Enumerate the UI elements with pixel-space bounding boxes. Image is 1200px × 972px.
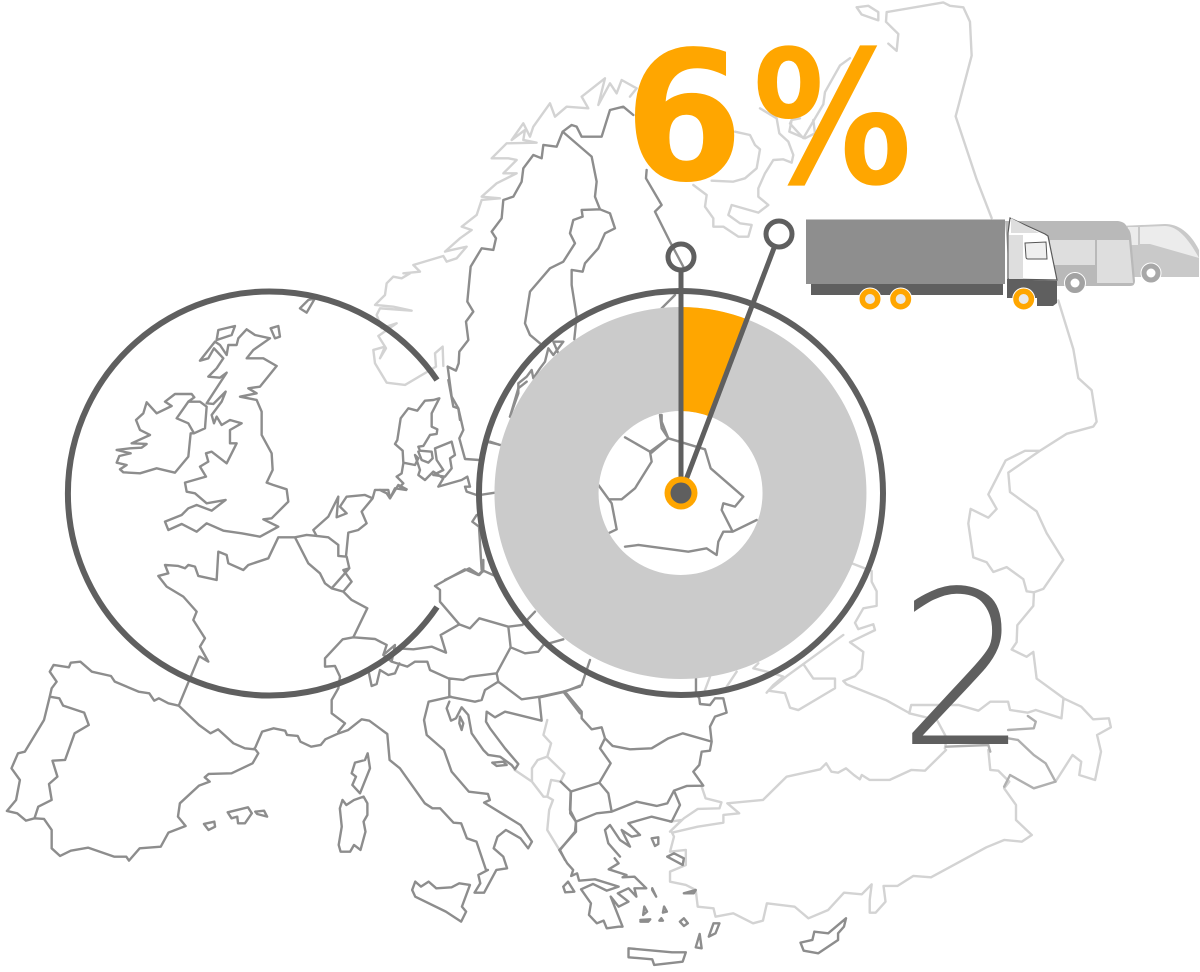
map: non-highlighted countries in light grey <box>373 2 1111 923</box>
donut remainder <box>494 307 866 679</box>
icon: truck <box>806 218 1057 310</box>
donut orange segment <box>680 307 749 417</box>
pointers with end markers <box>668 221 792 493</box>
outer ring <box>479 291 883 695</box>
donut centre hub <box>664 476 698 510</box>
icon: rear coach <box>1120 224 1199 283</box>
big percentage <box>624 11 912 227</box>
map: highlighted countries in darker grey <box>7 107 1056 965</box>
donut chart: 6 percent share <box>479 291 883 695</box>
large number 2: 2 <box>898 546 1029 795</box>
angled pointer <box>681 248 774 493</box>
big percentage: % <box>752 11 912 227</box>
vertical pointer marker <box>668 244 694 270</box>
icon: middle bus <box>1005 221 1135 294</box>
left partial circle <box>68 292 437 695</box>
big percentage: 6 <box>624 13 743 223</box>
angled pointer marker <box>766 221 792 247</box>
vertical pointer <box>678 270 684 493</box>
